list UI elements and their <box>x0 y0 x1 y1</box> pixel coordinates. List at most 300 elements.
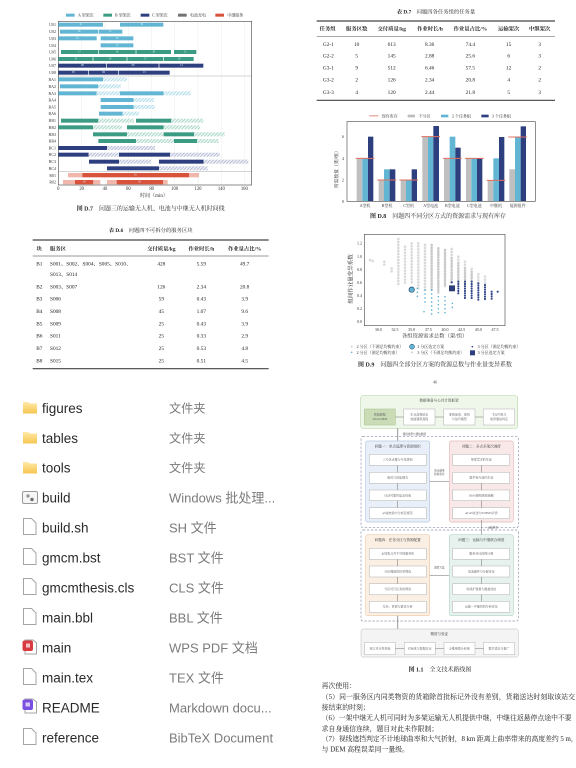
table D.7 rows: G2-2 <box>323 54 334 60</box>
table D.6 rows: 45 <box>159 309 164 315</box>
gantt row labels: BB4 <box>49 138 56 143</box>
file row: main.bbl: main.bbl <box>42 610 93 626</box>
gantt x axis: 120 <box>195 187 202 192</box>
table D.7 rows: 613 <box>388 42 396 48</box>
table D.7 header: 任务组 <box>320 24 336 32</box>
table D.6 rows: B7 <box>36 346 43 352</box>
gantt bars: relay drones <box>63 173 199 184</box>
panel: problem two: IOAS测线规划策略 <box>469 492 494 497</box>
table D.7 rows: 6 <box>507 54 510 60</box>
gantt bars: transport sorties: 14 <box>180 64 183 67</box>
table D.6 rows: S011 <box>50 334 61 340</box>
gantt bars: transport sorties: 09 <box>132 64 135 67</box>
table D.6 rows: B5 <box>36 321 43 327</box>
scatter axes: 45.0 <box>475 327 482 332</box>
scatter legend: 2 分区（不满足均衡约束） <box>357 343 403 349</box>
table D.7 rows: 57.5 <box>466 66 475 72</box>
gantt x axis <box>57 187 248 199</box>
panel: problem one: 航时与信能模式 <box>387 475 408 480</box>
gantt row labels: U03 <box>49 36 56 41</box>
table D.7 rows: 20.8 <box>466 78 475 84</box>
panel: problem one: 行动可靠性能定校验 <box>384 492 411 497</box>
scatter axes: 0.4 <box>357 293 362 298</box>
panel: problem one: 问题一：单点巡逻与资源组织 <box>375 443 421 448</box>
table D.6 rows: B4 <box>36 309 43 315</box>
gantt row labels: BC2 <box>49 152 56 157</box>
panel: problem one <box>366 441 430 522</box>
bar chart axes: A型机 <box>360 202 370 208</box>
gantt row labels: BA1 <box>48 77 56 82</box>
body paragraph: 再次使用： <box>322 681 356 690</box>
file row: README: Markdown docu... <box>169 700 272 716</box>
panel: problem one: 三分区点覆与分变规划 <box>383 457 413 462</box>
table D.7 rows: G3-1 <box>323 66 334 72</box>
file row: tools <box>23 460 206 476</box>
panel: data preparation: 原始数据 <box>374 412 386 417</box>
scatter axes <box>347 234 505 339</box>
body paragraph: （7）视线遮挡判定不计地球曲率和大气折射，8 km 距离上曲率带来的高度差约 5 m， <box>322 734 576 744</box>
table D.7 rows: 5 <box>355 54 358 60</box>
file row: build: Windows 批处理... <box>169 490 275 506</box>
file row: README <box>22 699 272 716</box>
scatter axes: 37.5 <box>425 327 432 332</box>
table D.6 rows: 428 <box>157 262 166 268</box>
table D.6 rows: 3.9 <box>241 321 248 327</box>
body paragraph: （6）一架中继无人机可同时为多架运输无人机提供中继，中继往返悬停点途中不要 <box>322 713 572 723</box>
bar chart legend: 现有库存 <box>382 112 398 118</box>
table D.7 rows: 8.36 <box>425 42 435 48</box>
bar chart axes: 4 <box>342 156 344 161</box>
file row: main.tex: main.tex <box>42 670 93 686</box>
gantt gridlines and frame <box>58 21 252 185</box>
file row: gmcm.bst <box>24 548 224 566</box>
dashed group: problems one and two <box>361 436 518 528</box>
panel: data preparation: 120 m DEM <box>372 417 387 421</box>
table D.6 header: 块 <box>37 244 43 252</box>
panel: data preparation: 地形通信判定 <box>490 416 508 421</box>
table D.7 rules <box>317 21 555 100</box>
table D.7 rows: 2 <box>355 78 358 84</box>
table D.6 rows: 0.51 <box>197 358 206 364</box>
table D.6 rows: 3.9 <box>241 297 248 303</box>
panel: problem four: 互补、资源与最优分析 <box>383 604 413 609</box>
table D.6 rows: 126 <box>157 284 166 290</box>
table D.6 rows: 1.07 <box>197 309 206 315</box>
gantt bars: transport sorties: 12 <box>76 37 79 40</box>
file row: gmcmthesis.cls: CLS 文件 <box>169 580 224 596</box>
table D.6 rows: B2 <box>36 284 43 290</box>
connector: problem one to two: 控制条件 <box>434 472 445 476</box>
bar chart axes: 中继机 <box>490 202 502 208</box>
bar chart axes: A型电池 <box>423 202 438 208</box>
file row: build.sh <box>24 518 217 536</box>
gantt row labels: BA2 <box>48 84 56 89</box>
caption: figure D.9: 图 D.9 问题四全部分区方案的资源总数与作业量变异系数 <box>358 360 512 368</box>
file row: gmcm.bst: gmcm.bst <box>42 550 101 566</box>
gantt row labels: BC3 <box>49 159 56 164</box>
file row: build.sh: SH 文件 <box>169 520 217 536</box>
panel: data preparation: 等级地形、建筑 <box>449 412 470 417</box>
table D.7 rows: G2-1 <box>323 42 334 48</box>
gantt bars: transport sorties: 11 <box>109 30 112 33</box>
table D.7 rows: 25.6 <box>466 54 475 60</box>
table D.6 rows: B6 <box>36 334 43 340</box>
gantt x axis: 80 <box>149 187 155 192</box>
bar chart axes: B型电池 <box>445 202 460 208</box>
panel: problem three: 电池循环与分配优化 <box>468 568 495 573</box>
table D.6 rows: 0.43 <box>197 297 206 303</box>
bar chart axes: 2 <box>342 177 344 182</box>
scatter axes: 32.5 <box>392 327 398 332</box>
file row: main.bbl: BBL 文件 <box>169 610 223 626</box>
gantt bars: batteries <box>58 77 248 170</box>
gantt bars: transport sorties: 14 <box>109 57 112 60</box>
scatter axes: 0.6 <box>357 280 362 285</box>
connector: preparation to analysis: 提供地形与通信数据 <box>403 432 426 436</box>
gantt x axis: 0 <box>57 187 60 192</box>
table D.6 rows: B3 <box>36 297 43 303</box>
table D.7 rows: 2.34 <box>425 78 435 84</box>
file row: tools: tools <box>42 460 71 476</box>
panel: accuracy and validation: 数学适应与推广 <box>489 645 509 650</box>
file row: tables <box>23 430 206 446</box>
table D.7 rows: 5 <box>507 90 510 96</box>
gantt bars: transport sorties: 15 <box>143 71 146 74</box>
gantt row labels: U04 <box>49 43 56 48</box>
panel: problem four <box>366 535 430 616</box>
chart: UAV, battery and relay timeline <box>48 11 252 212</box>
gantt bars: transport sorties: 16 <box>78 30 81 33</box>
file list panel <box>22 400 275 746</box>
file row: main pdf: WPS PDF 文档 <box>169 640 258 656</box>
gantt bars: transport sorties: 06 <box>102 71 106 74</box>
table D.7 header: 服务区数 <box>346 24 368 32</box>
table D.6 rows: 4.5 <box>241 358 248 364</box>
gantt bars: transport sorties: 08 <box>81 64 84 67</box>
file row: build <box>22 490 275 506</box>
panel: problem two <box>449 441 513 522</box>
table D.6 rows: S003、S007 <box>50 284 78 290</box>
file row: figures: figures <box>42 401 83 416</box>
table D.6 rows: 25 <box>159 334 164 340</box>
panel: problem one: μS前核验与分析及规范 <box>383 510 413 515</box>
gantt bars: transport sorties: 17 <box>144 57 147 60</box>
table D.7 rows: 2.88 <box>425 54 435 60</box>
file row: figures: 文件夹 <box>169 400 206 416</box>
bar chart axes: 所需数量（架/组） <box>333 148 340 188</box>
table D.7 title: 表 D.7 问题四各任务组的任务量 <box>397 7 476 15</box>
table D.6 rows: S013、S014 <box>50 272 78 278</box>
table D.7 rows: G3-3 <box>323 90 334 96</box>
panel: data preparation: 飞行约束与 <box>492 412 506 417</box>
selected three-partition scheme <box>449 286 455 291</box>
scatter axes: 各组资源需求总数（架/组） <box>402 331 467 339</box>
gantt bars: transport sorties: 05 <box>72 71 75 74</box>
table D.7 header: 作业量占比/% <box>454 24 487 32</box>
gantt bars: transport sorties <box>58 23 203 75</box>
table D.6 rows: B8 <box>36 358 43 364</box>
gantt row labels: BA3 <box>48 91 56 96</box>
body paragraph: 与 DEM 高程误差同一量级。 <box>322 744 409 753</box>
gantt row labels: BC1 <box>49 145 56 150</box>
table D.6 rows: S009 <box>50 321 61 327</box>
panel: problem three: 时间扩展最大覆盖选址 <box>466 586 496 591</box>
navy bars: three task groups <box>368 126 526 201</box>
gantt bars: transport sorties: 11 <box>184 50 187 53</box>
gantt row labels: U07 <box>49 63 56 68</box>
gantt row labels: U02 <box>49 29 56 34</box>
table D.6 rows: S001、S002、S004、S005、S010、 <box>50 262 131 268</box>
table D.7 header: 中继架次 <box>529 24 551 32</box>
table D.6 header: 服务区 <box>50 244 67 252</box>
connector: problem one to two: 单点通用 <box>434 468 445 472</box>
file row: reference: reference <box>42 730 99 746</box>
gantt x axis: 140 <box>218 187 225 192</box>
gantt legend: C 型架次 <box>152 11 168 17</box>
gantt bars: transport sorties: 13 <box>116 37 119 40</box>
cyan scatter points: two partitions <box>417 288 452 317</box>
panel: problem four: 分区阈值的枚举筛选 <box>384 568 411 573</box>
panel: problem three <box>449 535 513 616</box>
bar chart legend: 3 个任务组 <box>492 112 511 118</box>
bar chart axes: B型机 <box>382 202 392 208</box>
table D.6 rows: 4.8 <box>241 346 248 352</box>
body paragraph <box>322 681 576 753</box>
bar chart axes: C型电池 <box>467 202 482 208</box>
scatter legend <box>351 343 521 355</box>
table D.7 rows: 3 <box>538 42 541 48</box>
table D.7 rows: 6.46 <box>425 66 435 72</box>
caption: figure D.8: 图 D.8 问题四不同分区方式的资源需求与现有库存 <box>370 212 506 220</box>
file row: main.tex <box>24 668 224 686</box>
panel: data preparation: 生点高程转走 <box>410 412 428 417</box>
gantt row labels: BB3 <box>49 132 56 137</box>
table D.7 header: 交付质量/kg <box>377 24 406 32</box>
scatter axes: 1.0 <box>357 254 362 259</box>
table D.6 rows: 59 <box>159 297 164 303</box>
gantt bars: transport sorties: 16 <box>140 23 144 26</box>
table D.7 rows: 120 <box>388 90 396 96</box>
gantt bars: transport sorties: 10 <box>178 57 181 60</box>
file row: gmcmthesis.cls <box>24 578 224 596</box>
gantt row labels <box>48 22 56 184</box>
table D.6 rows: 9.6 <box>241 309 248 315</box>
file row: figures <box>23 400 206 416</box>
table D.6 rows: 25 <box>159 358 164 364</box>
file row: main pdf: main <box>42 640 71 656</box>
gantt legend: B 型架次 <box>115 11 131 17</box>
gantt row labels: U05 <box>49 49 56 54</box>
table D.7 rows: 126 <box>388 78 396 84</box>
file row: gmcmthesis.cls: gmcmthesis.cls <box>42 580 135 596</box>
table D.6: indivisible service blocks <box>33 226 269 369</box>
panel: problem two: 数学划分迭代生成 <box>469 475 493 480</box>
table D.6 rows: 0.53 <box>197 346 206 352</box>
file row: main.tex: TEX 文件 <box>169 670 224 686</box>
flowchart: technical roadmap upper part <box>361 396 518 528</box>
inventory lines <box>356 137 527 180</box>
bar chart axes: 能源组件 <box>510 202 526 208</box>
scatter legend: 3 分区（不满足均衡约束） <box>417 349 464 355</box>
panel: problem two: 频度需求的生成 <box>471 457 492 462</box>
panel: accuracy and validation: 精度与验证 <box>430 631 449 636</box>
table D.6 rows: S008 <box>50 309 61 315</box>
gantt x axis: 时间（min） <box>140 192 168 199</box>
scatter legend: 3 分区（满足均衡约束） <box>478 343 521 349</box>
gantt row labels: U01 <box>49 22 56 27</box>
table D.7 rows: 10 <box>354 42 360 48</box>
table D.6 header: 作业量占比/% <box>228 244 261 252</box>
file row: reference: BibTeX Document <box>169 730 273 746</box>
scatter legend: 3 分区选定方案 <box>478 349 505 355</box>
table D.7 rows: 4 <box>507 78 510 84</box>
table D.6 rows: S015 <box>50 358 61 364</box>
dashed group: problems three and four <box>361 530 518 621</box>
gantt row labels: BA5 <box>48 104 56 109</box>
table D.6 rows: 49.7 <box>240 262 250 268</box>
file row: gmcm.bst: BST 文件 <box>169 550 224 566</box>
connector: problem two to three <box>481 520 498 535</box>
panel: data preparation: 数据准备与公共计算框架 <box>419 398 459 403</box>
panel: accuracy and validation: 全维参数分析策 <box>449 645 470 650</box>
bar chart axes <box>333 122 535 208</box>
gantt bars: transport sorties: 18 <box>152 50 156 53</box>
table D.6 rows: 5.59 <box>197 262 206 268</box>
gantt bars: transport sorties: 13 <box>116 44 119 47</box>
table D.7 header: 运输架次 <box>498 24 520 32</box>
caption: figure D.7: 图 D.7 问题三的运输无人机、电池与中继无人机时间线 <box>77 204 225 212</box>
gantt row labels: R02 <box>49 179 56 184</box>
gantt x axis: 60 <box>126 187 131 192</box>
gantt bars: transport sorties: 16 <box>116 50 119 53</box>
table D.7 rows: 21.8 <box>466 90 475 96</box>
gantt x axis: 20 <box>79 187 85 192</box>
file row: main.bbl <box>24 608 223 626</box>
table D.6 rows: B1 <box>36 262 43 268</box>
table D.7 rows: 9 <box>355 66 358 72</box>
panel: accuracy and validation: 独立可行性校验 <box>370 645 390 650</box>
gantt row labels: BA6 <box>48 111 56 116</box>
table D.7 rows: 4 <box>355 90 358 96</box>
file row: main pdf <box>22 640 258 656</box>
table D.6 title: 表 D.6 问题四不可拆分的服务区块 <box>109 226 193 234</box>
panel: problem four: 问题四：任务分区与资源配置 <box>375 537 421 542</box>
connector: problem one to two <box>430 468 449 482</box>
file row: tables: tables <box>42 431 78 446</box>
table D.6 rows: 25 <box>159 321 164 327</box>
grey scatter points: constraint not met <box>370 239 485 293</box>
gantt bars: transport sorties: 17 <box>78 50 81 53</box>
gantt row labels: BA4 <box>48 97 56 102</box>
panel: problem two: 问题二：多点多架次调度 <box>462 443 501 448</box>
cyan bars: two task groups <box>362 137 521 201</box>
table D.7 rows: 2 <box>538 66 541 72</box>
panel: problem four: 全局集合并不可拆服务块 <box>381 551 414 556</box>
file row: tables: 文件夹 <box>169 430 206 446</box>
flowchart: technical roadmap lower part <box>361 520 518 657</box>
panel: problem three: 问题三：运输与中继联合调度 <box>458 537 505 542</box>
scatter axes: 1.2 <box>357 240 362 245</box>
table D.7: task group workloads <box>317 7 555 100</box>
gantt x axis: 160 <box>241 187 248 192</box>
panel: data preparation: 与信号模型 <box>452 416 467 421</box>
gantt row labels: BC4 <box>49 166 56 171</box>
table D.7 rows: 2.44 <box>425 90 435 96</box>
bar chart legend <box>369 112 511 118</box>
scatter axes: 组间作业量变异系数 <box>347 254 355 304</box>
table D.7 rows: 3 <box>538 90 541 96</box>
bar chart axes: C型机 <box>403 202 414 208</box>
scatter axes: 0.0 <box>357 319 362 324</box>
table D.6 rows: 25 <box>159 346 164 352</box>
gantt legend: A 型架次 <box>78 11 94 17</box>
bar chart legend: 2 个任务组 <box>452 112 471 118</box>
gantt row labels: BB2 <box>49 125 56 130</box>
gantt legend: 中继服务 <box>227 11 243 17</box>
gantt bars: transport sorties: 15 <box>74 57 78 60</box>
table D.6 rows: 0.33 <box>197 334 206 340</box>
gantt bars: transport sorties: 12 <box>79 23 83 26</box>
gantt row labels: R01 <box>49 173 56 178</box>
table D.6 rows: 2.9 <box>241 334 248 340</box>
table D.7 header: 作业时长/h <box>417 24 443 32</box>
chart: partition scatter plot <box>347 234 521 384</box>
gantt bars: relay drones: 01 <box>134 173 137 176</box>
scatter axes: 47.5 <box>492 327 498 332</box>
caption: figure 1.1 and body text <box>322 665 576 753</box>
table D.7 rows: 145 <box>388 54 396 60</box>
table D.7 rows <box>323 42 541 96</box>
connector: problem two to three: 运输约束 <box>488 525 498 529</box>
bar chart legend: 不分区 <box>419 112 431 118</box>
chart: resource demand vs inventory bar chart <box>333 112 535 220</box>
table D.6 rules <box>33 240 269 369</box>
connector: problem four to three <box>430 565 449 575</box>
scatter legend: 2 分区（满足均衡约束） <box>357 349 400 355</box>
body paragraph: 接结束的时刻； <box>322 702 370 711</box>
gantt legend: 电池充电 <box>190 11 206 17</box>
body paragraph: 求自身通信连续，题目对此未作限制； <box>322 724 438 734</box>
panel: problem three: 运输—中继协同分析优化 <box>465 604 498 609</box>
table D.7 rows: 3 <box>538 54 541 60</box>
file row: README: README <box>42 700 100 716</box>
bar chart axes: 0 <box>342 199 344 204</box>
table D.6 rows: S012 <box>50 346 61 352</box>
file row: build.sh: build.sh <box>42 520 89 536</box>
connector: problem four to three: 调度方案 <box>434 565 445 569</box>
gantt row labels: U08 <box>49 70 56 75</box>
table D.7 rows: G3-2 <box>323 78 334 84</box>
selected two-partition scheme <box>409 287 414 292</box>
table D.7 rows: 2 <box>538 78 541 84</box>
table D.7 header <box>320 24 551 32</box>
table D.7 rows: 512 <box>388 66 396 72</box>
file row: tools: 文件夹 <box>169 460 206 475</box>
gantt bars: relay drones: 02 <box>138 180 142 183</box>
table D.6 rows <box>36 262 250 364</box>
table D.6 rows: 20.8 <box>240 284 250 290</box>
table D.6 header: 交付质量/kg <box>147 244 176 252</box>
scatter axes: 35.0 <box>408 327 415 332</box>
gantt bars: relay drones: 10 <box>83 180 86 183</box>
bar chart axes: 6 <box>342 134 344 139</box>
caption: figure 1.1: 图 1.1 全文技术路线图 <box>409 665 471 673</box>
panel: accuracy and validation: 对标体与数据对比 <box>408 645 432 650</box>
table D.6 rows: 0.43 <box>197 321 206 327</box>
scatter axes: 42.5 <box>458 327 465 332</box>
connector: preparation to analysis <box>398 428 426 441</box>
gantt row labels: BB1 <box>49 118 56 123</box>
